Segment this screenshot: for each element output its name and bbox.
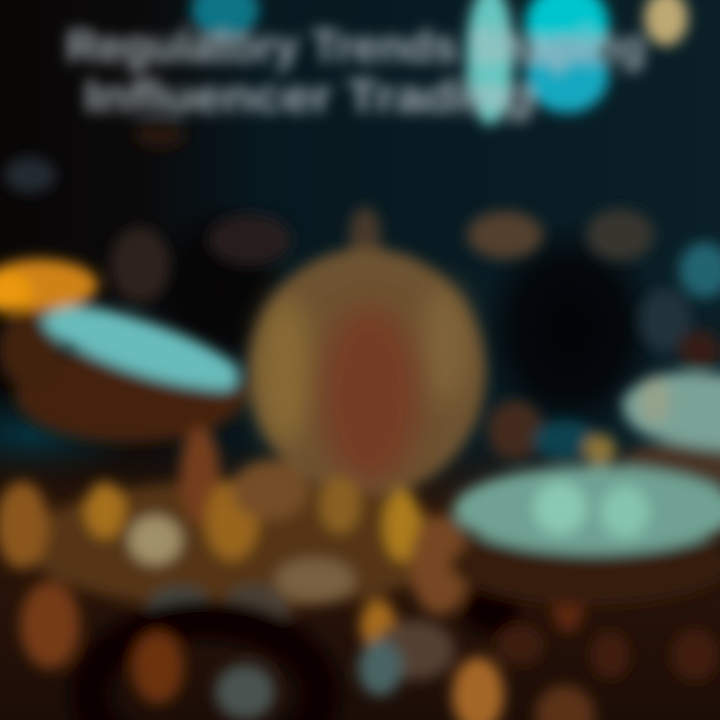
right lower bowl: [450, 434, 720, 605]
title: [66, 20, 646, 122]
top cyan lights: [191, 0, 688, 125]
lower coin pile: [0, 427, 470, 680]
right edge glow: [533, 242, 720, 460]
background bokeh lights: [4, 121, 654, 303]
right upper bowl: [620, 372, 720, 489]
foreground lights: [132, 577, 719, 720]
left bowl: [0, 306, 245, 443]
small coin right of main coin: [487, 400, 543, 460]
title: Influencer Trading: [84, 70, 534, 122]
dark ring foreground: [90, 620, 320, 720]
dark background masses: [0, 200, 720, 720]
coin: [248, 207, 486, 496]
orange light at left: [0, 259, 98, 312]
title: Regulatory Trends Shaping: [66, 20, 646, 72]
